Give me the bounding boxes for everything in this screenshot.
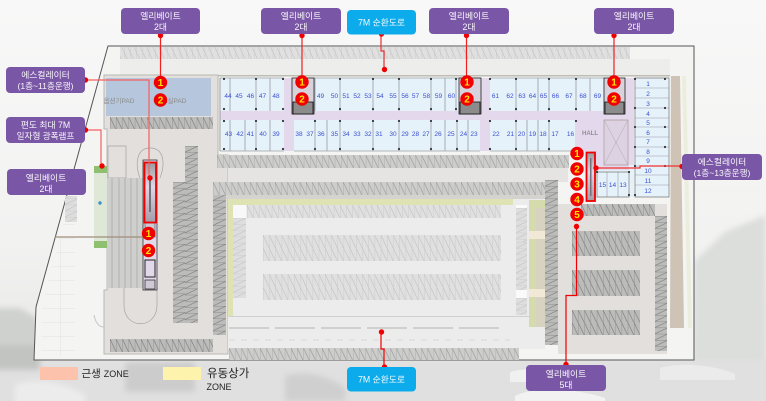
callout: elevator 2 units B: 엘리베이트	[281, 11, 321, 21]
callout: 7M ring road bottom	[347, 367, 416, 392]
east retail strip	[516, 200, 545, 327]
unit numbers: 23	[470, 131, 478, 138]
unit numbers: 18	[539, 131, 547, 138]
unit numbers: 30	[389, 131, 397, 138]
unit numbers: 56	[401, 93, 409, 100]
top parking strip	[118, 47, 670, 76]
unit numbers: 62	[506, 93, 514, 100]
unit numbers: 13	[619, 182, 627, 189]
numbered elevator markers: 1	[146, 229, 152, 240]
escalator highlight: west	[144, 162, 156, 222]
unit numbers: 19	[529, 131, 536, 138]
unit numbers: 27	[422, 131, 430, 138]
callout: one-way ramp	[6, 117, 85, 143]
numbered elevator markers: 1	[611, 78, 617, 88]
unit numbers: 6	[646, 130, 650, 137]
callout: escalator floors 1-13	[682, 154, 762, 180]
unit numbers: 48	[272, 93, 280, 100]
callout: one-way ramp: 편도 최대 7M	[21, 119, 70, 130]
west parking block	[104, 75, 228, 354]
callout: elevator 2 units C: 엘리베이트	[449, 11, 489, 21]
unit numbers: 17	[551, 131, 559, 138]
unit numbers: 21	[507, 131, 514, 138]
unit numbers: 53	[364, 93, 372, 100]
unit numbers: 49	[317, 93, 324, 100]
numbered elevator markers: 1	[299, 78, 305, 88]
elevator cores	[292, 78, 625, 114]
green ramp	[94, 166, 107, 248]
unit numbers: 61	[492, 93, 499, 100]
callout: 7M ring road top	[347, 10, 416, 34]
callout: elevator 2 units A	[121, 8, 200, 34]
unit numbers: 36	[317, 131, 325, 138]
callout: elevator 2 units C	[429, 8, 509, 34]
callout: elevator 2 units E	[7, 169, 86, 195]
unit numbers: 50	[331, 93, 338, 100]
unit numbers: 25	[447, 131, 455, 138]
unit numbers: 28	[412, 131, 419, 138]
leader dots	[83, 31, 685, 370]
blue PAD area: 옵션기PAD	[104, 96, 135, 105]
callout: 7M ring road top: 7M 순환도로	[358, 16, 405, 28]
unit numbers: 31	[375, 131, 383, 138]
unit numbers: 10	[644, 168, 652, 175]
numbered elevator markers: 2	[146, 246, 152, 257]
leader lines	[55, 34, 682, 367]
building footprint	[34, 46, 694, 360]
unit numbers: 3	[646, 101, 650, 108]
unit numbers: 69	[594, 93, 601, 100]
numbered elevator markers: 1	[574, 149, 580, 160]
callout: elevator 2 units B: 2대	[294, 22, 308, 32]
left plaza	[41, 196, 77, 356]
callout: elevator 5 units: 5대	[560, 380, 572, 390]
unit numbers: 2	[646, 91, 650, 98]
callout: elevator 2 units A: 엘리베이트	[140, 11, 181, 21]
legend: circulation retail zone: 유동상가	[207, 367, 250, 380]
unit numbers: 4	[646, 111, 650, 118]
unit numbers: 65	[540, 93, 547, 100]
numbered elevator markers: 2	[611, 94, 617, 106]
callout: elevator 2 units D: 엘리베이트	[614, 11, 654, 21]
callout: elevator 5 units: 엘리베이트	[546, 369, 586, 379]
west core	[143, 160, 157, 290]
callout: elevator 2 units C: 2대	[462, 22, 476, 32]
unit numbers: 20	[518, 131, 525, 138]
site plan	[34, 46, 694, 360]
unit numbers: 58	[423, 93, 430, 100]
unit numbers: 26	[434, 131, 442, 138]
retail floor	[220, 78, 669, 197]
unit numbers: 59	[435, 93, 442, 100]
unit numbers: 35	[331, 131, 338, 138]
east edge	[670, 76, 690, 328]
unit numbers: 43	[225, 131, 232, 138]
unit numbers: 34	[342, 131, 350, 138]
callout: escalator floors 1-13: 에스컬레이터	[698, 157, 746, 167]
callout: escalator floors 1-11	[6, 67, 85, 93]
unit numbers: 41	[247, 131, 254, 138]
callout: elevator 2 units B	[261, 8, 341, 34]
callout: one-way ramp: 일자형 광폭램프	[17, 130, 74, 141]
numbered elevator markers: 1	[464, 78, 470, 88]
unit numbers: 16	[567, 131, 574, 138]
unit numbers: 33	[353, 131, 361, 138]
unit numbers: 57	[412, 93, 419, 100]
unit numbers: 5	[646, 120, 650, 127]
numbered elevator markers: 4	[574, 195, 580, 206]
callout: elevator 2 units E: 엘리베이트	[26, 173, 66, 183]
unit numbers: 40	[259, 131, 267, 138]
callout: elevator 2 units A: 2대	[154, 22, 167, 32]
unit numbers: 24	[460, 131, 467, 138]
numbered elevator markers: 2	[299, 94, 305, 106]
unit numbers: 42	[236, 131, 244, 138]
numbered elevator markers: 2	[158, 96, 164, 106]
numbered elevator markers: 2	[464, 94, 470, 106]
unit numbers: 7	[646, 139, 650, 146]
numbered elevator markers: 1	[158, 78, 164, 89]
callout: elevator 2 units D: 2대	[628, 22, 640, 32]
numbered elevator markers	[142, 75, 621, 257]
west hatch columns	[185, 146, 198, 323]
callout: elevator 2 units E: 2대	[40, 184, 52, 194]
unit numbers: 46	[247, 93, 254, 100]
legend: circulation retail zone	[163, 367, 250, 392]
unit numbers: 29	[401, 131, 409, 138]
callout: escalator floors 1-11: 에스컬레이터	[21, 70, 70, 80]
unit numbers: 11	[645, 178, 652, 185]
unit numbers: 67	[565, 93, 573, 100]
unit numbers: 47	[259, 93, 266, 100]
unit numbers: 8	[646, 149, 650, 156]
unit numbers: 15	[599, 182, 606, 189]
numbered elevator markers: 5	[574, 210, 580, 221]
central court	[228, 199, 546, 360]
unit numbers: 38	[295, 131, 303, 138]
callout: escalator floors 1-13: (1층~13층운행)	[694, 167, 750, 178]
unit numbers: 52	[353, 93, 361, 100]
unit numbers: 14	[609, 182, 616, 189]
unit numbers: 12	[644, 188, 652, 195]
unit numbers: 22	[492, 131, 500, 138]
ramp curves	[108, 146, 163, 178]
unit numbers: 45	[235, 93, 243, 100]
unit numbers: 60	[448, 93, 455, 100]
legend: neighbourhood retail zone	[40, 367, 129, 380]
east parking block	[558, 204, 667, 354]
unit numbers: 64	[529, 93, 536, 100]
unit numbers: 63	[518, 93, 526, 100]
blue PAD area: 공조실PAD	[156, 96, 187, 105]
escalator highlight: east	[586, 152, 595, 201]
blue PAD area	[104, 78, 211, 116]
retail floor: HALL	[582, 131, 598, 137]
numbered elevator markers: 2	[574, 164, 580, 176]
unit numbers	[224, 81, 652, 195]
unit numbers: 68	[579, 93, 587, 100]
unit numbers: 37	[306, 131, 314, 138]
unit numbers: 44	[224, 93, 232, 100]
callout: 7M ring road bottom: 7M 순환도로	[358, 374, 405, 384]
callout: elevator 5 units	[526, 365, 606, 391]
callout: elevator 2 units D	[594, 8, 674, 34]
unit numbers: 1	[646, 81, 650, 88]
unit numbers: 9	[646, 158, 650, 165]
unit numbers: 51	[342, 93, 350, 100]
unit numbers: 54	[376, 93, 384, 100]
ramp lanes	[94, 178, 157, 327]
corridor bands	[217, 155, 569, 168]
unit numbers: 32	[364, 131, 372, 138]
unit numbers: 39	[272, 131, 280, 138]
legend: neighbourhood retail zone: 근생 ZONE	[82, 368, 129, 380]
numbered elevator markers: 3	[574, 180, 580, 190]
unit numbers: 55	[389, 93, 397, 100]
legend: circulation retail zone: ZONE	[206, 382, 232, 392]
callout: escalator floors 1-11: (1층~11층운행)	[17, 80, 74, 91]
unit numbers: 66	[552, 93, 559, 100]
